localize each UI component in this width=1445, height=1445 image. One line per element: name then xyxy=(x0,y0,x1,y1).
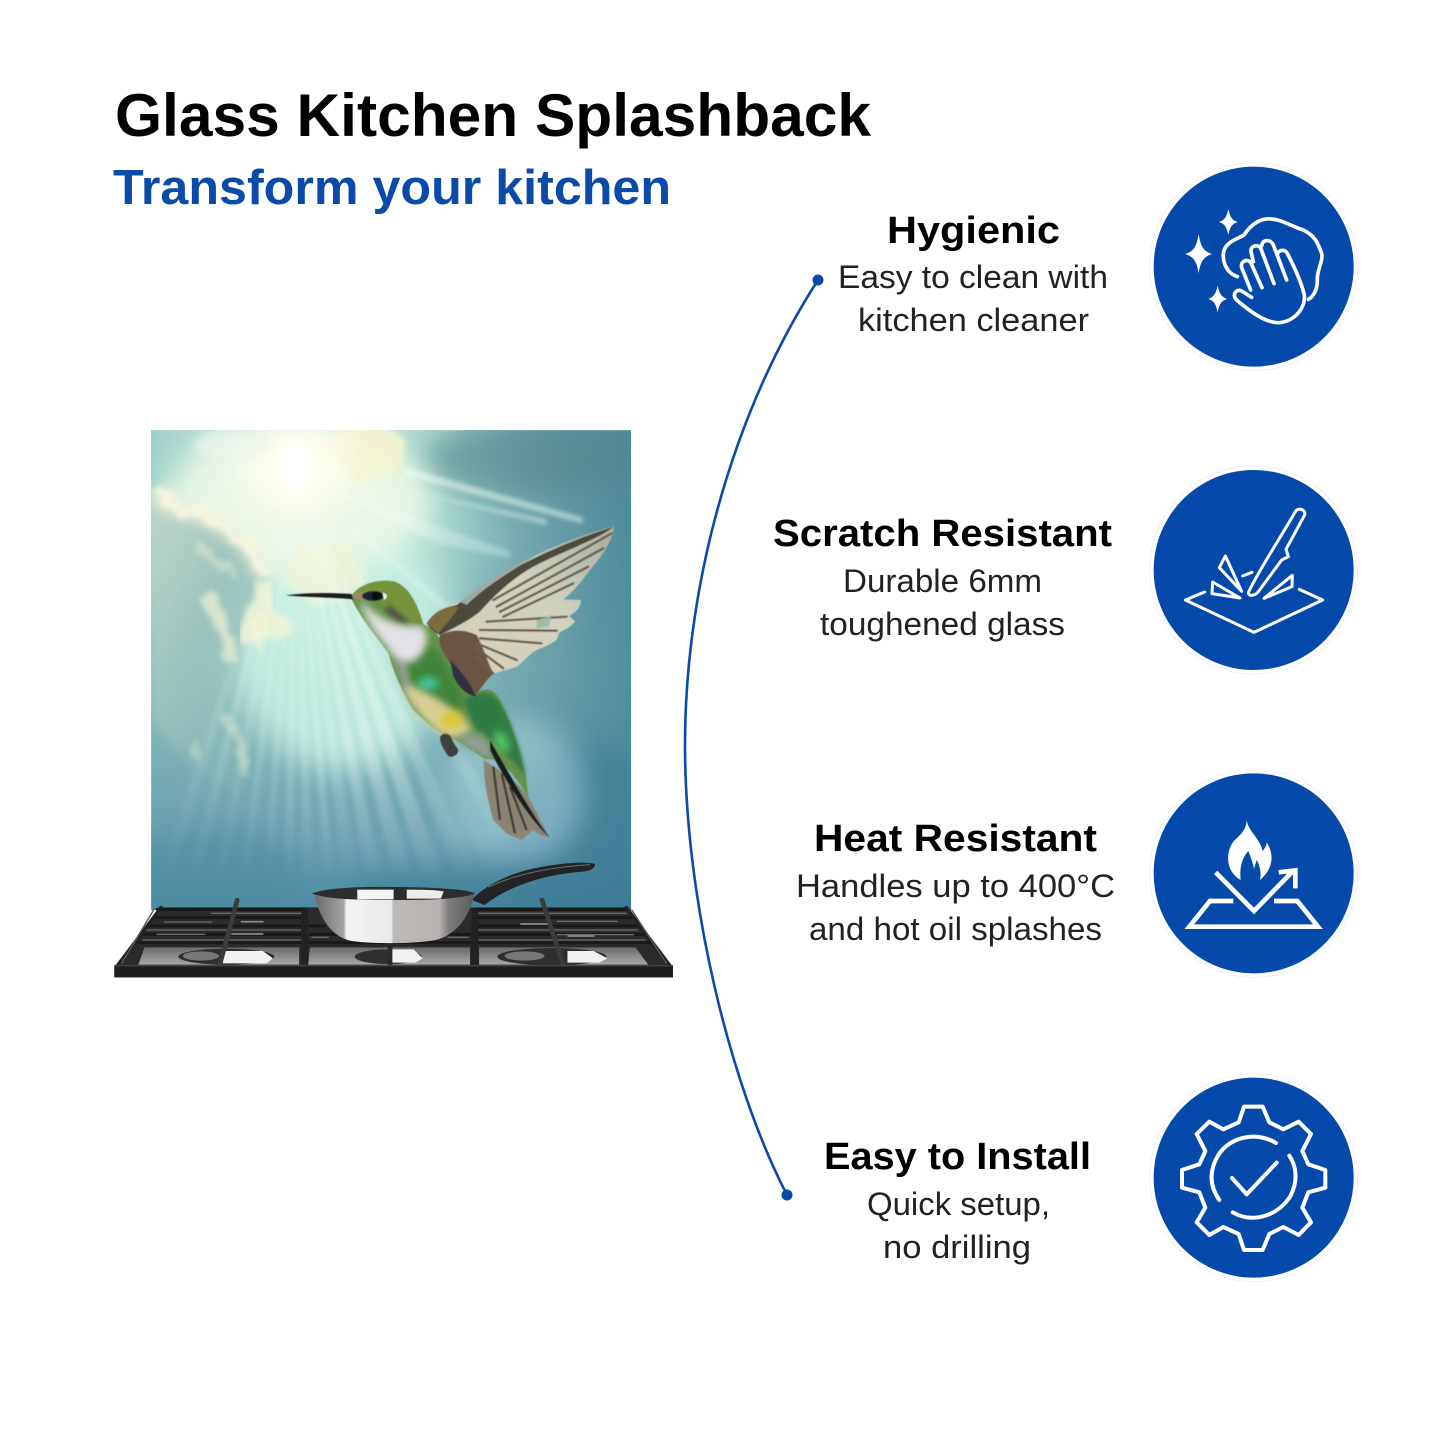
description: Durable 6mm xyxy=(843,563,1042,599)
subtitle: Transform your kitchen xyxy=(113,161,671,215)
head xyxy=(286,581,423,624)
foot xyxy=(440,734,458,757)
sun xyxy=(240,430,354,510)
description xyxy=(796,868,1115,947)
description: and hot oil splashes xyxy=(809,911,1102,947)
product image: splashback above gas hob xyxy=(114,420,692,977)
pan rim xyxy=(312,887,475,900)
front strip xyxy=(114,965,673,977)
gas hob xyxy=(114,863,673,977)
description: Quick setup, xyxy=(867,1186,1050,1222)
icon: knife scratching glass xyxy=(1150,466,1358,674)
icon: hand wiping with sparkles xyxy=(1150,163,1358,371)
heading: Easy to Install xyxy=(824,1136,1091,1178)
hummingbird xyxy=(286,526,614,840)
connector dot: top xyxy=(812,274,824,286)
hob base xyxy=(114,907,673,977)
frying pan xyxy=(312,863,595,943)
wing xyxy=(427,526,614,697)
tail xyxy=(484,760,549,840)
feature: Heat Resistant xyxy=(796,818,1115,947)
title: Glass Kitchen Splashback xyxy=(115,82,872,149)
connector curve xyxy=(685,274,824,1200)
description xyxy=(820,563,1065,642)
sun rays xyxy=(189,548,489,864)
feature: Scratch Resistant xyxy=(773,513,1112,642)
infographic canvas xyxy=(114,92,1358,1282)
description: toughened glass xyxy=(820,606,1065,642)
icon: flame over glass with arrow xyxy=(1150,769,1358,977)
icon: gear with check mark xyxy=(1150,1074,1358,1282)
burner plates xyxy=(138,947,648,965)
connector dot: bottom xyxy=(782,1190,792,1200)
feature: Hygienic xyxy=(838,210,1108,338)
pan handle xyxy=(472,863,595,905)
heading: Scratch Resistant xyxy=(773,513,1112,555)
description: kitchen cleaner xyxy=(858,302,1089,338)
description xyxy=(838,259,1108,338)
splashback glass panel with sky xyxy=(117,420,692,951)
vertical grate bridges xyxy=(220,900,563,965)
heading: Hygienic xyxy=(887,210,1060,252)
body xyxy=(352,581,549,837)
description: Easy to clean with xyxy=(838,259,1108,295)
description: Handles up to 400°C xyxy=(796,868,1115,904)
burners xyxy=(178,948,607,965)
pan body xyxy=(315,893,475,943)
clouds xyxy=(151,422,405,791)
grate bars xyxy=(119,907,669,965)
description xyxy=(867,1186,1050,1265)
feature: Easy to Install xyxy=(824,1136,1091,1265)
heading: Heat Resistant xyxy=(814,818,1097,860)
beak xyxy=(286,593,353,599)
description: no drilling xyxy=(883,1229,1031,1265)
